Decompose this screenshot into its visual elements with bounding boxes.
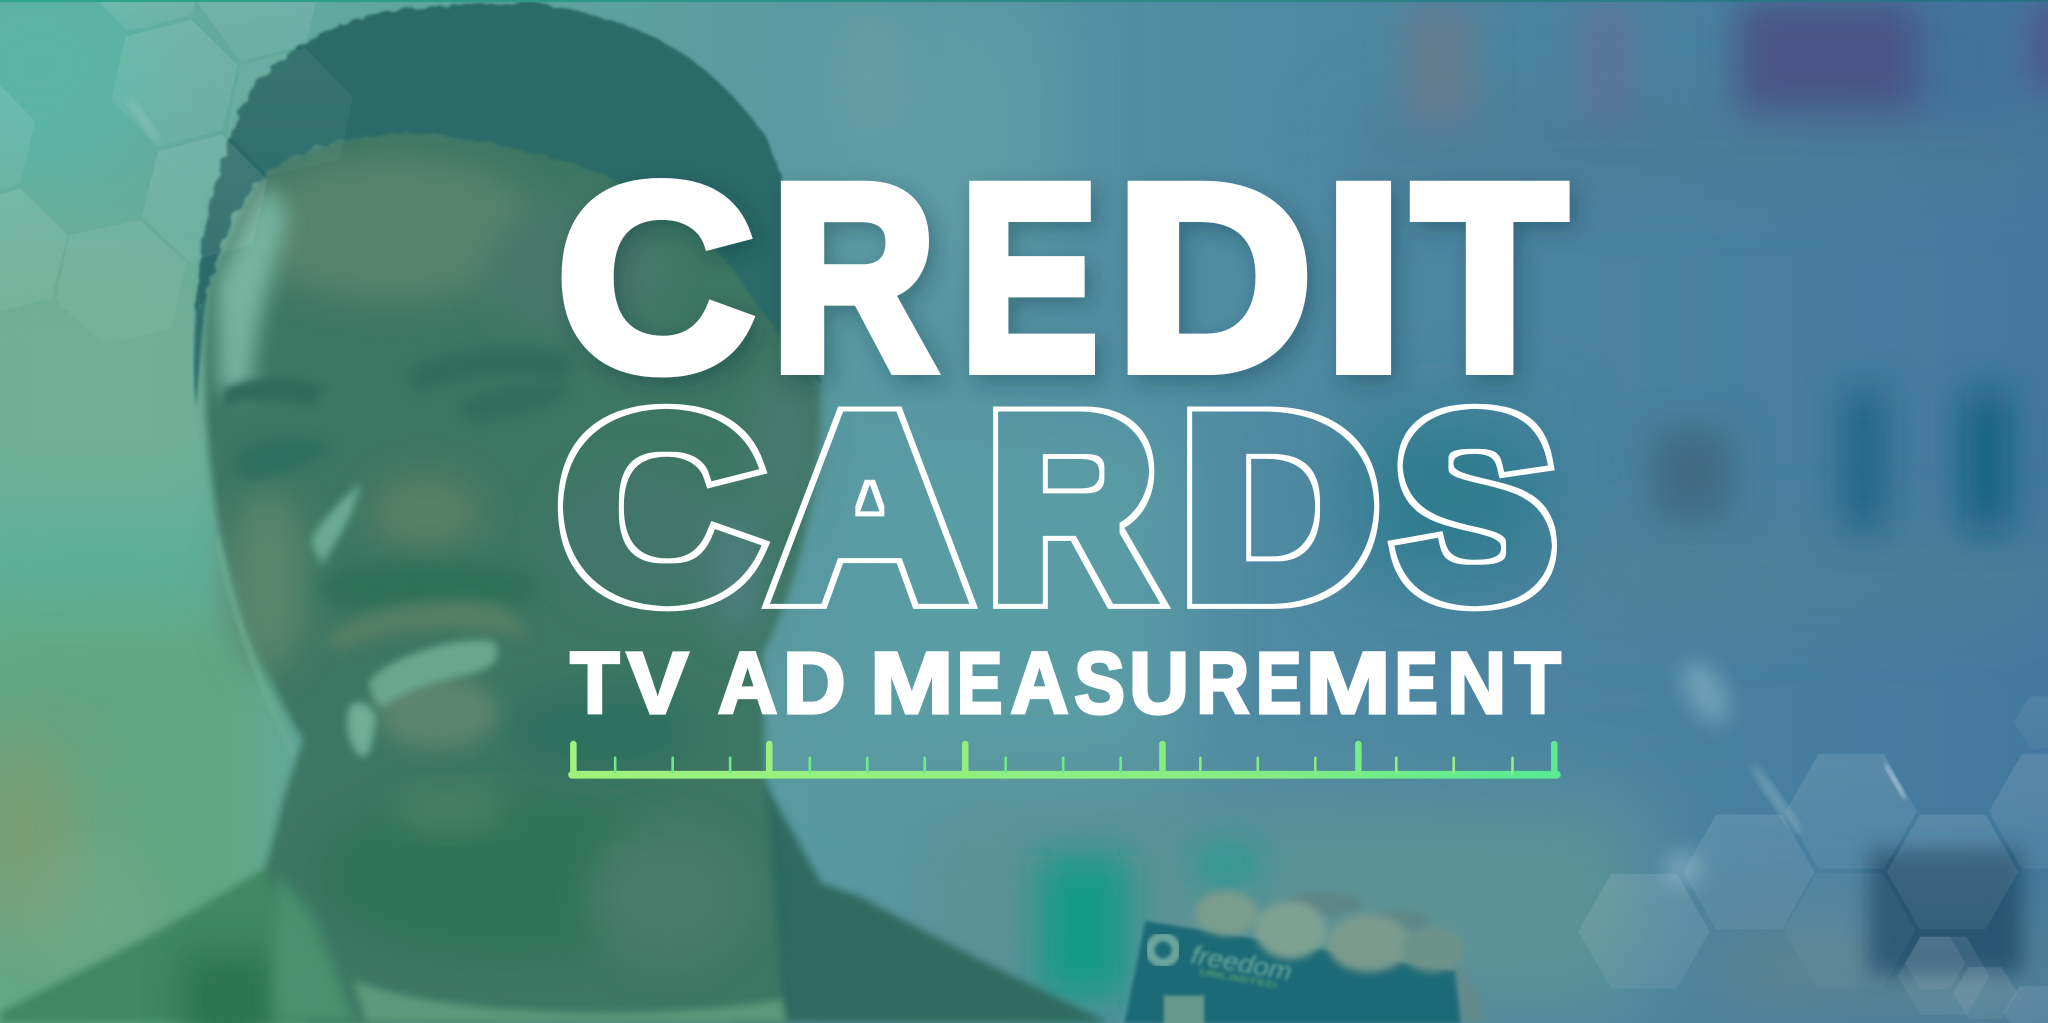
card logo <box>1150 937 1176 963</box>
title: CARDS outlined: A <box>772 363 968 653</box>
title: CREDIT: T <box>1413 130 1567 426</box>
temple highlight <box>216 183 287 398</box>
right eye <box>457 384 572 421</box>
under nose shadow <box>315 562 537 614</box>
title: CREDIT: R <box>771 130 936 426</box>
title: CREDIT: E <box>960 130 1098 426</box>
top edge line <box>0 0 2048 2</box>
brow area shading <box>483 203 666 333</box>
jacket inner shade <box>183 954 274 1023</box>
subtitle: E <box>1395 634 1438 732</box>
hexagons bottom right <box>1578 696 2048 1023</box>
subtitle: A <box>718 634 777 732</box>
chin highlight <box>396 792 505 828</box>
person <box>0 3 1110 1023</box>
left eyebrow <box>223 379 324 408</box>
title: CREDIT: C <box>556 130 755 426</box>
neck light <box>585 823 747 967</box>
subtitle: U <box>1129 634 1189 732</box>
subtitle: T <box>570 634 619 732</box>
right eyebrow <box>406 348 572 392</box>
left side hair line <box>194 294 206 408</box>
chin and beard <box>320 797 686 954</box>
nose highlight <box>311 483 360 564</box>
collar stripe <box>273 875 355 1023</box>
subtitle: S <box>1074 634 1125 732</box>
subtitle: N <box>1447 634 1506 732</box>
teeth <box>368 640 498 707</box>
jaw shade right <box>509 692 692 771</box>
major ticks <box>570 741 1558 777</box>
title: CARDS outlined: D <box>1181 363 1378 653</box>
subtitle: R <box>1196 634 1249 732</box>
card wordmark: freedom <box>1189 939 1294 987</box>
subtitle: T <box>1514 634 1561 732</box>
subtitle: D <box>783 634 846 732</box>
left eye <box>232 439 332 479</box>
light sparkles <box>125 97 1908 887</box>
card chip <box>1164 996 1204 1023</box>
subtitle: M <box>870 634 953 732</box>
lower lip <box>377 675 498 749</box>
title: CREDIT: I <box>1323 130 1404 426</box>
card sub wordmark: UNLIMITED <box>1199 967 1278 990</box>
ruler base <box>568 771 1561 779</box>
subtitle: V <box>627 634 688 732</box>
lower tooth <box>347 702 376 758</box>
credit card in hand <box>1125 891 1485 1023</box>
minor ticks <box>614 756 1514 773</box>
hexagons top left <box>0 0 353 345</box>
subtitle: A <box>1011 634 1069 732</box>
title: CARDS outlined: S <box>1394 363 1556 653</box>
left jaw line <box>214 536 295 755</box>
jacket left <box>0 836 392 1023</box>
cheek tones <box>229 372 810 673</box>
forehead <box>242 157 542 300</box>
subtitle: E <box>1256 634 1302 732</box>
fingers <box>1195 891 1485 1023</box>
subtitle: E <box>957 634 1002 732</box>
head and neck silhouette <box>205 124 820 1023</box>
title: CARDS outlined: R <box>988 363 1157 653</box>
title: CREDIT: D <box>1115 130 1313 426</box>
jacket right <box>731 771 1110 1023</box>
upper lip arc <box>323 600 526 653</box>
hair <box>196 3 820 383</box>
title: CARDS outlined: C <box>559 363 761 653</box>
shirt collar <box>353 980 786 1023</box>
card body <box>1125 921 1462 1023</box>
subtitle: M <box>1305 634 1391 732</box>
ruler icon <box>568 741 1561 779</box>
